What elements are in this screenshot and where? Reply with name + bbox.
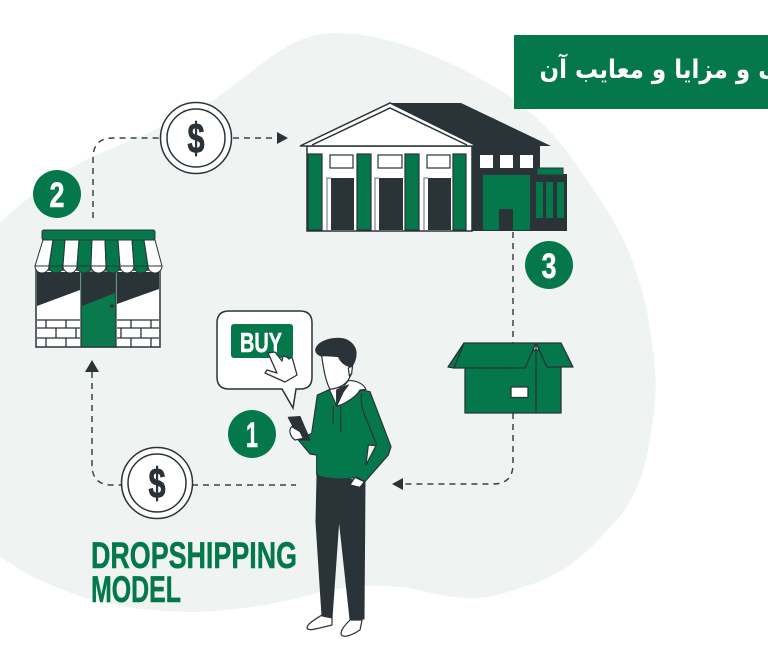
title: dropshipping model: MODEL	[91, 569, 181, 610]
warehouse	[300, 103, 567, 231]
dollar coin top: $	[188, 115, 205, 163]
upper body	[288, 338, 391, 487]
dashed flow lines	[92, 138, 513, 485]
step badge 1	[228, 410, 276, 458]
step badge 3: 3	[542, 247, 556, 286]
storefront	[35, 230, 162, 347]
trousers	[316, 476, 365, 619]
dollar coin bottom	[122, 448, 192, 518]
step badge 2: 2	[50, 176, 64, 215]
open box	[448, 343, 573, 413]
shoes	[307, 615, 362, 636]
title: dropshipping model	[91, 535, 297, 610]
step badge 2	[33, 170, 81, 218]
speech bubble with buy button	[217, 311, 312, 408]
background blob	[0, 33, 656, 612]
title: dropshipping model: DROPSHIPPING	[91, 535, 297, 576]
dollar coin top	[160, 102, 232, 174]
step badge 1: 1	[246, 416, 258, 455]
arrowheads	[85, 132, 403, 490]
banner heading	[514, 35, 768, 109]
dollar coin bottom: $	[148, 460, 166, 508]
person	[288, 338, 391, 636]
speech bubble with buy button: BUY	[240, 327, 282, 358]
step badge 3	[525, 241, 573, 289]
